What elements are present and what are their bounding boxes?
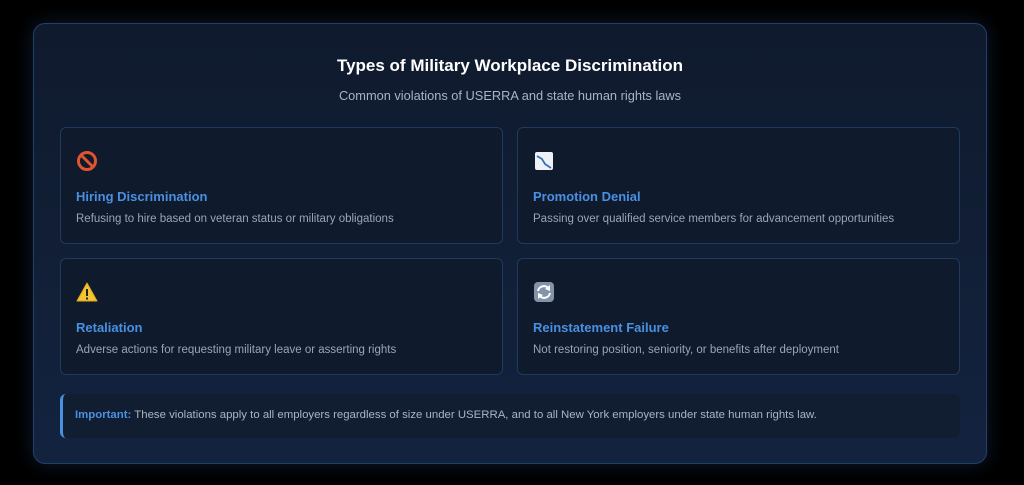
card: hiring bbox=[60, 127, 503, 244]
heading: Retaliation bbox=[76, 320, 142, 335]
text: Refusing to hire based on veteran status or military obligations bbox=[76, 213, 394, 225]
card: promotion bbox=[517, 127, 960, 244]
subtitle: Common violations of USERRA and state human rights laws bbox=[339, 88, 681, 103]
title: Types of Military Workplace Discrimination bbox=[337, 56, 683, 75]
text: Adverse actions for requesting military leave or asserting rights bbox=[76, 344, 396, 356]
icon: chart down bbox=[535, 152, 553, 170]
icon: prohibited bbox=[77, 151, 97, 171]
icon: refresh bbox=[534, 282, 554, 302]
card: reinstatement bbox=[517, 258, 960, 375]
text: Passing over qualified service members for advancement opportunities bbox=[533, 213, 894, 225]
text: Not restoring position, seniority, or benefits after deployment bbox=[533, 344, 839, 356]
callout: important: Important: These violations apply to all employers regardless of size under USERRA, and to all New York employers under state human rights law. bbox=[75, 409, 817, 421]
heading: Hiring Discrimination bbox=[76, 189, 207, 204]
heading: Promotion Denial bbox=[533, 189, 641, 204]
card: retaliation bbox=[60, 258, 503, 375]
callout: important bbox=[60, 394, 960, 438]
icon: warning bbox=[76, 282, 98, 302]
heading: Reinstatement Failure bbox=[533, 320, 669, 335]
